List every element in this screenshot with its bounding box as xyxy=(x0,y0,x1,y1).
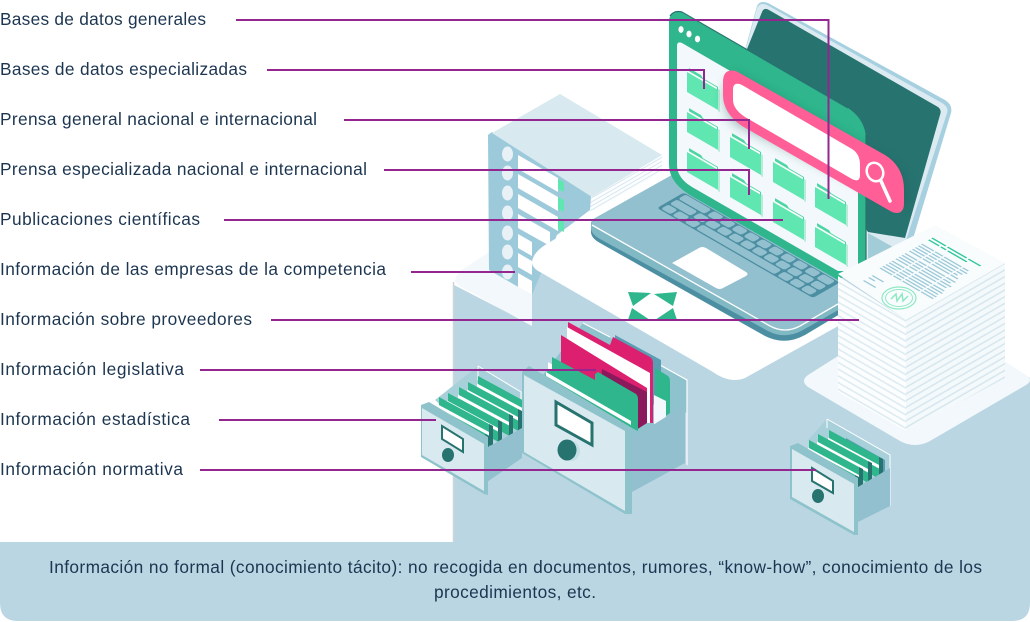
drawer interior xyxy=(435,366,521,443)
green folder front xyxy=(545,357,638,431)
hanging folders xyxy=(804,430,883,498)
sheet heading xyxy=(929,238,980,268)
white sheet right xyxy=(654,395,666,425)
white sheet front xyxy=(548,362,633,425)
stack right face xyxy=(906,263,1005,431)
right platform xyxy=(804,356,1030,445)
drawer side xyxy=(487,428,522,482)
keyboard xyxy=(657,192,840,298)
folder shadow xyxy=(600,369,647,430)
label 3: Prensa general nacional e internacional xyxy=(0,109,317,129)
binder spine xyxy=(488,132,592,295)
drawer label xyxy=(556,402,592,445)
drawer interior xyxy=(808,419,890,495)
paper stack xyxy=(838,225,1005,431)
rear key row xyxy=(678,194,835,285)
search bar shadow xyxy=(723,72,908,208)
drawer front xyxy=(522,366,632,514)
label 8: Información legislativa xyxy=(0,359,184,379)
cabinet left edge xyxy=(452,282,454,543)
label 5: Publicaciones científicas xyxy=(0,209,200,229)
back file xyxy=(615,335,661,420)
pink folder front xyxy=(561,335,647,423)
center drawer xyxy=(522,322,687,514)
binder rings xyxy=(502,146,513,280)
green folder back xyxy=(655,368,670,423)
folder grid xyxy=(687,67,848,267)
sheet text lines xyxy=(861,244,975,310)
browser window xyxy=(669,12,908,280)
pink folder back xyxy=(568,322,653,423)
binder labels xyxy=(518,155,558,295)
logo mark xyxy=(628,292,677,320)
search bar xyxy=(723,70,904,213)
back monitor xyxy=(745,2,951,270)
back file xyxy=(846,438,885,478)
leader lines xyxy=(200,20,859,470)
binder cover xyxy=(492,94,662,197)
search input xyxy=(733,84,860,180)
label 2: Bases de datos especializadas xyxy=(0,59,247,79)
drawer knob xyxy=(812,489,824,503)
footnote text: procedimientos, etc. xyxy=(434,582,596,602)
front key row xyxy=(661,204,818,295)
drawer knob xyxy=(442,448,454,462)
cabinet background xyxy=(454,262,1030,560)
label 9: Información estadística xyxy=(0,409,190,429)
drawer side xyxy=(858,468,890,522)
drawer knob xyxy=(558,440,580,461)
stack top sheet xyxy=(838,225,1005,320)
label 1: Bases de datos generales xyxy=(0,9,206,29)
white cabinet top xyxy=(532,170,840,380)
hanging folders xyxy=(434,376,532,457)
label 10: Información normativa xyxy=(0,459,183,479)
drawer front xyxy=(421,402,488,495)
label 6: Información de las empresas de la competencia xyxy=(0,259,386,279)
left platform xyxy=(455,250,532,326)
label 7: Información sobre proveedores xyxy=(0,309,252,329)
drawer interior xyxy=(535,323,687,440)
white sheet xyxy=(567,327,650,423)
trackpad xyxy=(672,247,748,289)
icon: magnifier xyxy=(864,160,890,201)
drawer label xyxy=(812,468,833,493)
right drawer xyxy=(790,419,890,535)
stack left face xyxy=(838,276,906,431)
drawer side xyxy=(632,405,685,492)
laptop base xyxy=(591,158,840,341)
left drawer xyxy=(421,366,532,495)
label 4: Prensa especializada nacional e internacional xyxy=(0,159,367,179)
source labels xyxy=(0,9,386,479)
binder stack xyxy=(488,94,662,295)
middle key row xyxy=(670,200,827,290)
binder tags xyxy=(558,179,564,232)
bottom panel xyxy=(0,542,1030,621)
drawer label xyxy=(442,426,463,452)
drawer front xyxy=(790,443,858,535)
binder pages xyxy=(590,155,662,213)
window frame xyxy=(669,12,866,280)
window dots xyxy=(678,26,700,42)
stamp xyxy=(882,287,916,309)
footnote text xyxy=(49,557,982,602)
footnote text: Información no formal (conocimiento tácito): no recogida en documentos, rumores, “know-how”, conocimiento de los xyxy=(49,557,982,577)
window content xyxy=(677,42,858,271)
